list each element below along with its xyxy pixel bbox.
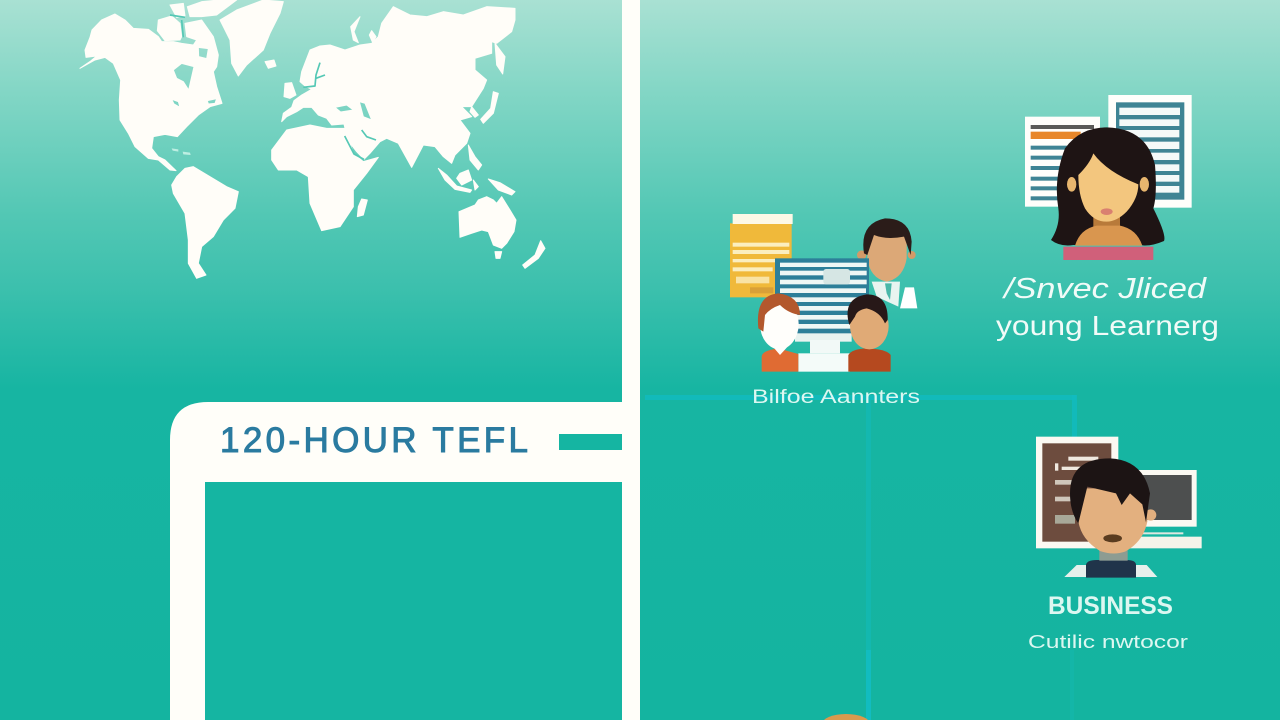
Kamchatka: [495, 43, 505, 74]
Japan: [481, 92, 498, 123]
group: business learners: [1036, 437, 1202, 578]
label: business: BUSINESS: [1048, 592, 1173, 620]
panel: 120-hour TEFL card: [170, 402, 622, 720]
South America: [172, 167, 238, 278]
North America: [80, 14, 222, 171]
group: beginner learners: [730, 214, 917, 372]
card inner panel: [205, 482, 622, 720]
label: business subtitle: Cutilic nwtocor: [1028, 632, 1188, 652]
icon: doctor: [857, 218, 917, 308]
Australia: [459, 197, 516, 248]
label: young learners line one: /Snvec Jliced: [1002, 273, 1207, 305]
connector lines: [645, 395, 1077, 720]
icon: young woman: [1051, 127, 1164, 260]
label: young learners line two: young Learnerg: [996, 310, 1219, 341]
icon: business man: [1064, 458, 1157, 578]
Iceland: [265, 60, 276, 68]
world map: [80, 0, 545, 278]
Caribbean islands: [172, 148, 191, 155]
Madagascar: [357, 199, 367, 217]
inland seas: [170, 15, 376, 159]
group: young learners: [1025, 95, 1192, 260]
Greenland: [220, 0, 283, 76]
UK and Ireland: [284, 83, 296, 98]
Eurasia: [282, 7, 515, 167]
New Zealand: [523, 241, 545, 268]
icon: dark-haired student: [848, 294, 891, 372]
icon: right document: [1108, 95, 1192, 208]
icon: left document: [1025, 117, 1100, 207]
card accent bar: [559, 434, 622, 450]
New Guinea: [488, 179, 515, 195]
icon: laptop: [1110, 470, 1202, 548]
Southeast Asia islands: [438, 145, 482, 192]
vertical divider: [622, 0, 640, 720]
icon: yellow document: [730, 214, 793, 297]
icon: brown document: [1036, 437, 1118, 548]
Novaya Zemlya: [351, 17, 360, 43]
label: beginner learners: Bilfoe Aannters: [752, 387, 920, 408]
Arctic islands: [157, 0, 237, 41]
Tasmania: [495, 252, 502, 258]
Korea: [470, 107, 478, 117]
Africa: [272, 125, 378, 231]
card heading: 120-HOUR TEFL: [220, 421, 528, 460]
icon: partial head at bottom: [822, 714, 870, 720]
icon: red-haired student: [758, 293, 800, 372]
icon: computer screen: [775, 258, 869, 372]
